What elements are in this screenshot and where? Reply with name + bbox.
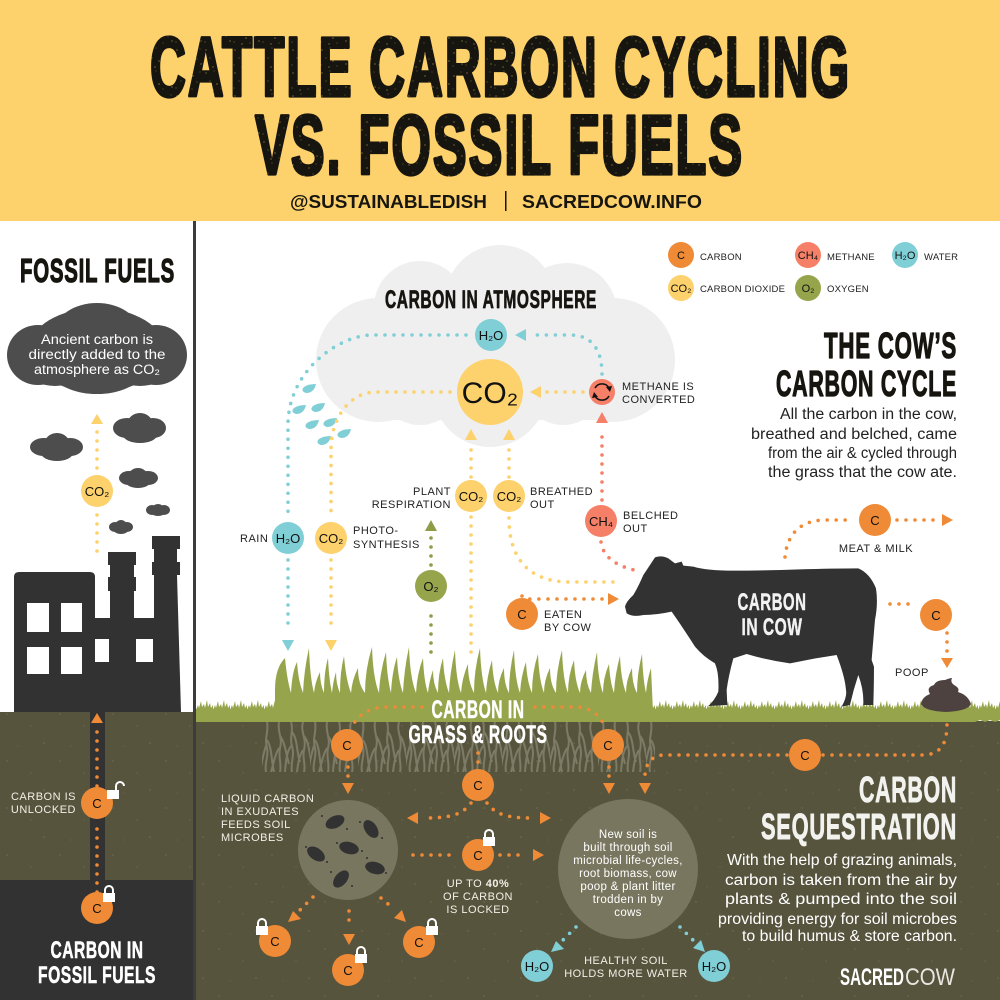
label: liquid carbon [221, 793, 314, 844]
belched out node: CH₄ [589, 514, 613, 529]
arrow: methane to water [515, 329, 602, 374]
new soil circle: New soil is [599, 829, 657, 841]
carbon node: soil: C [800, 748, 810, 763]
water node in cloud [475, 319, 507, 351]
eaten by cow node [506, 598, 592, 634]
plant respiration node: PLANT [413, 486, 451, 498]
tall grass patch [275, 647, 653, 712]
title [150, 20, 851, 192]
label: liquid carbon: FEEDS SOIL [221, 819, 291, 831]
locked carbon: lower right: C [414, 935, 424, 950]
legend: carbon dioxide: CO₂ [671, 283, 691, 295]
label: liquid carbon: LIQUID CARBON [221, 793, 314, 805]
new soil circle: poop & plant litter [580, 881, 676, 893]
rain node: RAIN [240, 533, 268, 545]
arrows: soil to water [551, 927, 705, 952]
carbon node: grass right: C [603, 738, 613, 753]
label: methane is converted: CONVERTED [622, 394, 695, 406]
carbon node: grass left: C [342, 738, 352, 753]
legend: water [892, 242, 958, 268]
subtitle handles: SACREDCOW.INFO [522, 191, 702, 212]
text: carbon sequestration: With the help of grazing animals, [727, 852, 957, 869]
smoke clouds [30, 413, 170, 534]
callout cloud: ancient carbon [7, 303, 187, 394]
label: up to 40% locked [443, 878, 513, 916]
label: up to 40% locked: OF CARBON [443, 891, 513, 903]
heading: carbon in grass and roots: CARBON IN [432, 696, 524, 724]
arrows: CO2 up from respiration and breath [465, 429, 620, 656]
poop carbon node: POOP [895, 667, 929, 679]
heading: carbon in fossil fuels: FOSSIL FUELS [38, 962, 156, 989]
rain node: H₂O [276, 531, 300, 546]
label: methane is converted [622, 381, 695, 406]
legend: water: H₂O [895, 250, 916, 262]
heading: carbon in fossil fuels [38, 937, 156, 989]
microbes circle [298, 800, 398, 900]
label: carbon is unlocked: CARBON IS [11, 791, 76, 803]
heading: carbon in fossil fuels: CARBON IN [50, 937, 144, 964]
belched out node: OUT [623, 523, 648, 535]
new soil circle: trodden in by [593, 894, 663, 906]
text: carbon sequestration: providing energy for soil microbes [718, 911, 957, 928]
icon: cow [625, 556, 877, 707]
oxygen node [415, 570, 447, 602]
heading: carbon in atmosphere: CARBON IN ATMOSPHERE [385, 286, 597, 314]
text: cow carbon cycle: the grass that the cow ate. [768, 464, 957, 481]
big CO2 node [457, 359, 523, 425]
locked carbon: centre: C [473, 848, 483, 863]
arrow: poop to soil carbon [823, 724, 947, 755]
label: carbon is unlocked [11, 791, 76, 816]
carbon locked in fossil fuels [81, 886, 115, 924]
methane converted node [589, 379, 615, 405]
legend: oxygen [795, 275, 869, 301]
meat and milk node [839, 504, 913, 555]
text: carbon sequestration: plants & pumped into the soil [725, 891, 957, 908]
CO2 bubble [81, 475, 113, 507]
poop carbon node: C [931, 608, 941, 623]
legend: carbon: CARBON [700, 252, 742, 263]
heading: carbon in grass and roots [408, 696, 548, 749]
plant respiration node: RESPIRATION [372, 499, 451, 511]
legend: water: WATER [924, 252, 958, 263]
legend: oxygen: OXYGEN [827, 284, 869, 295]
belched out node: BELCHED [623, 510, 678, 522]
header band [0, 0, 1000, 221]
eaten by cow node: EATEN [544, 609, 582, 621]
arrow: CO2 to photosynthesis [331, 392, 450, 517]
label: up to 40% locked: IS LOCKED [446, 904, 510, 916]
rain drops [292, 384, 351, 445]
heading: the cow's carbon cycle [776, 325, 957, 404]
photosynthesis node: SYNTHESIS [353, 539, 420, 551]
carbon node: centre [462, 769, 494, 801]
arrows: microbes to locked carbon [288, 897, 406, 945]
rain node [240, 522, 304, 554]
label: carbon is unlocked: UNLOCKED [11, 804, 76, 816]
label: healthy soil: HOLDS MORE WATER [564, 968, 688, 980]
locked carbon: lower left: C [270, 934, 280, 949]
carbon node: grass left [331, 729, 363, 761]
callout cloud: ancient carbon: directly added to the [28, 347, 166, 362]
callout cloud: ancient carbon: atmosphere as CO₂ [34, 362, 160, 377]
ground grass band [196, 699, 1000, 722]
photosynthesis node: PHOTO- [353, 525, 399, 537]
legend: carbon dioxide [668, 275, 785, 301]
subtitle handles: @SUSTAINABLEDISH [290, 191, 487, 212]
photosynthesis node: CO₂ [319, 531, 343, 546]
water node: left [521, 950, 553, 982]
arrow: CO2 from factory [91, 414, 103, 551]
oxygen node: O₂ [423, 579, 439, 594]
panel divider [193, 221, 196, 1000]
meat and milk node: MEAT & MILK [839, 543, 913, 555]
label: healthy soil [564, 955, 688, 980]
water node: left: H₂O [525, 959, 549, 974]
locked carbon: lower middle: C [343, 963, 353, 978]
logo: sacred cow: SACRED [840, 964, 904, 991]
breathed out node [493, 480, 593, 512]
arrow: water to rain [288, 335, 466, 516]
meat and milk node: C [870, 513, 880, 528]
arrow: cow to CH4 [601, 542, 634, 570]
text: carbon sequestration: carbon is taken from the air by [725, 872, 957, 889]
new soil circle: cows [614, 907, 642, 919]
arrow: unlocked fossil carbon [91, 713, 103, 892]
legend: methane: CH₄ [798, 250, 819, 262]
arrow: meat and milk in [785, 520, 853, 557]
carbon unlocked node: C [92, 796, 102, 811]
carbon node: centre: C [473, 778, 483, 793]
text: carbon sequestration: to build humus & store carbon. [742, 928, 957, 945]
heading: carbon in grass and roots: GRASS & ROOTS [408, 721, 548, 749]
new soil circle: root biomass, cow [579, 868, 677, 880]
new soil circle: built through soil [583, 842, 673, 854]
eaten by cow node: BY COW [544, 622, 592, 634]
photosynthesis node [315, 522, 420, 554]
plant respiration node: CO₂ [459, 489, 483, 504]
heading: fossil fuels: FOSSIL FUELS [20, 252, 175, 289]
poop carbon node [895, 599, 952, 679]
breathed out node: OUT [530, 499, 555, 511]
icon: poop [921, 678, 971, 712]
water node in cloud: H₂O [479, 328, 503, 343]
arrow: eaten by cow [522, 593, 619, 605]
heading: carbon in cow: IN COW [742, 614, 802, 641]
text: cow carbon cycle: All the carbon in the cow, [780, 406, 957, 423]
subtitle handles [290, 191, 702, 212]
heading: carbon in cow: CARBON [738, 589, 806, 616]
legend: carbon [668, 242, 742, 268]
big CO2 node: CO₂ [462, 377, 518, 410]
legend [668, 242, 958, 301]
heading: carbon sequestration [761, 769, 957, 847]
soil ground: right panel [196, 721, 1000, 1000]
carbon node: soil [789, 739, 821, 771]
new soil circle [558, 799, 698, 939]
callout cloud: ancient carbon: Ancient carbon is [41, 332, 153, 347]
legend: methane [795, 242, 875, 268]
label: methane is converted: METHANE IS [622, 381, 694, 393]
roots [262, 722, 655, 772]
left panel: fossil soil [0, 712, 193, 1000]
locked carbon: lower right [403, 919, 438, 958]
legend: methane: METHANE [827, 252, 875, 263]
text: cow carbon cycle: breathed and belched, came [751, 426, 957, 443]
cloud: carbon in atmosphere [316, 245, 675, 447]
legend: oxygen: O₂ [802, 283, 814, 295]
legend: carbon: C [677, 250, 685, 262]
eaten by cow node: C [517, 607, 527, 622]
label: up to 40% locked: UP TO 40% [447, 878, 509, 890]
text: cow carbon cycle [751, 406, 957, 481]
locked carbon: lower middle [332, 947, 367, 986]
new soil circle: microbial life-cycles, [573, 855, 683, 867]
text: carbon sequestration [718, 852, 957, 945]
carbon node: grass right [592, 729, 624, 761]
arrow: CH4 up [596, 412, 608, 500]
label: liquid carbon: MICROBES [221, 832, 284, 844]
legend: carbon dioxide: CARBON DIOXIDE [700, 284, 785, 295]
arrow: to poop [890, 604, 953, 668]
arrows: carbon to microbes and soil [407, 803, 551, 861]
logo: sacred cow: COW [905, 964, 955, 991]
plant respiration node [372, 480, 487, 512]
label: healthy soil: HEALTHY SOIL [584, 955, 668, 967]
water node: right: H₂O [702, 959, 726, 974]
breathed out node: BREATHED [530, 486, 593, 498]
breathed out node: CO₂ [497, 489, 521, 504]
arrow: methane to CO2 [530, 386, 583, 398]
belched out node [585, 505, 678, 537]
arrow: oxygen [425, 520, 437, 652]
carbon locked in fossil fuels: C [92, 901, 102, 916]
CO2 bubble: CO₂ [85, 484, 109, 499]
locked carbon: lower left [256, 919, 291, 957]
arrow: photosynthesis to ground [325, 560, 337, 651]
arrow: meat and milk out [897, 514, 953, 526]
arrows: grass carbon branches [342, 707, 615, 794]
icon: factory [14, 536, 181, 712]
locked carbon: centre [462, 830, 495, 871]
arrow: soil carbon to new soil [639, 755, 787, 794]
water node: right [698, 950, 730, 982]
heading: carbon in cow [738, 589, 806, 641]
carbon unlocked node [81, 782, 124, 819]
label: liquid carbon: IN EXUDATES [221, 806, 299, 818]
text: cow carbon cycle: from the air & cycled through [768, 445, 957, 462]
arrow: rain to ground [282, 560, 294, 651]
